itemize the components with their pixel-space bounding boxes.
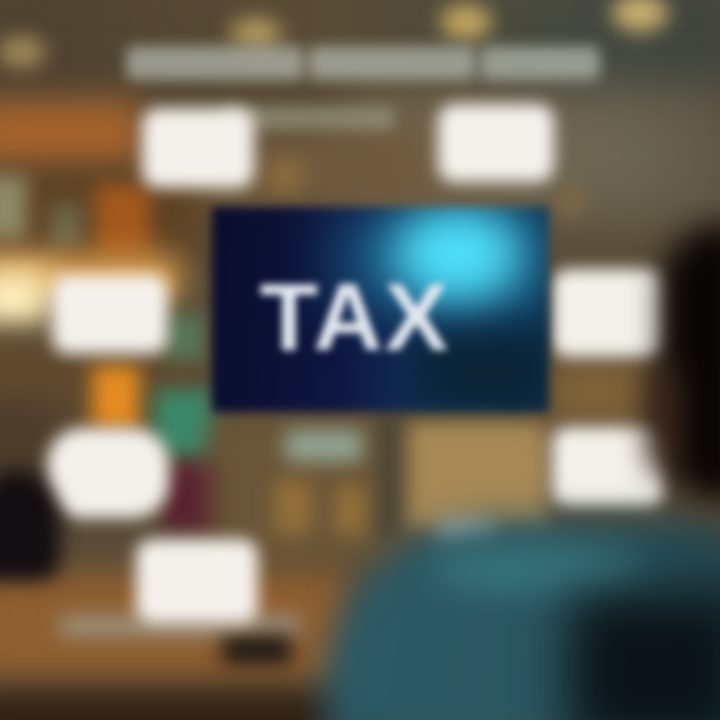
screen [212,207,549,412]
centre below screen [210,415,410,565]
title first line, third group [480,46,600,80]
screen lower shade [412,332,549,412]
person shoulders: teal shirt [325,520,720,720]
screen heading: TAX: TAX [260,264,450,371]
small panel: bottom centre [440,522,496,552]
person shirt shadow [570,595,720,720]
wood beam left [0,100,140,168]
person head [662,225,720,500]
ceiling lights [0,36,46,68]
panel: top right [438,104,554,182]
title first line, first group [126,46,304,80]
panel: lower left [47,428,169,518]
lit shelf [0,256,180,301]
foreground figure, left [0,470,60,580]
screen glow [392,207,522,302]
person shirt highlight [430,545,640,595]
person face edge [650,370,680,470]
shelves left [0,170,200,265]
panel: top left [142,108,254,188]
screen mid glow [332,207,549,312]
light wood wall panel [408,422,548,532]
panel: bottom left [136,539,258,623]
person silhouette [304,206,720,720]
panel: lower right [552,427,664,507]
panel: middle left [52,274,168,354]
title second line [222,106,394,130]
green and maroon objects [155,390,215,455]
title [118,38,608,136]
title first line, second group [308,46,476,80]
ceiling [0,0,720,110]
panel: middle right [552,269,664,357]
desk [0,572,350,682]
